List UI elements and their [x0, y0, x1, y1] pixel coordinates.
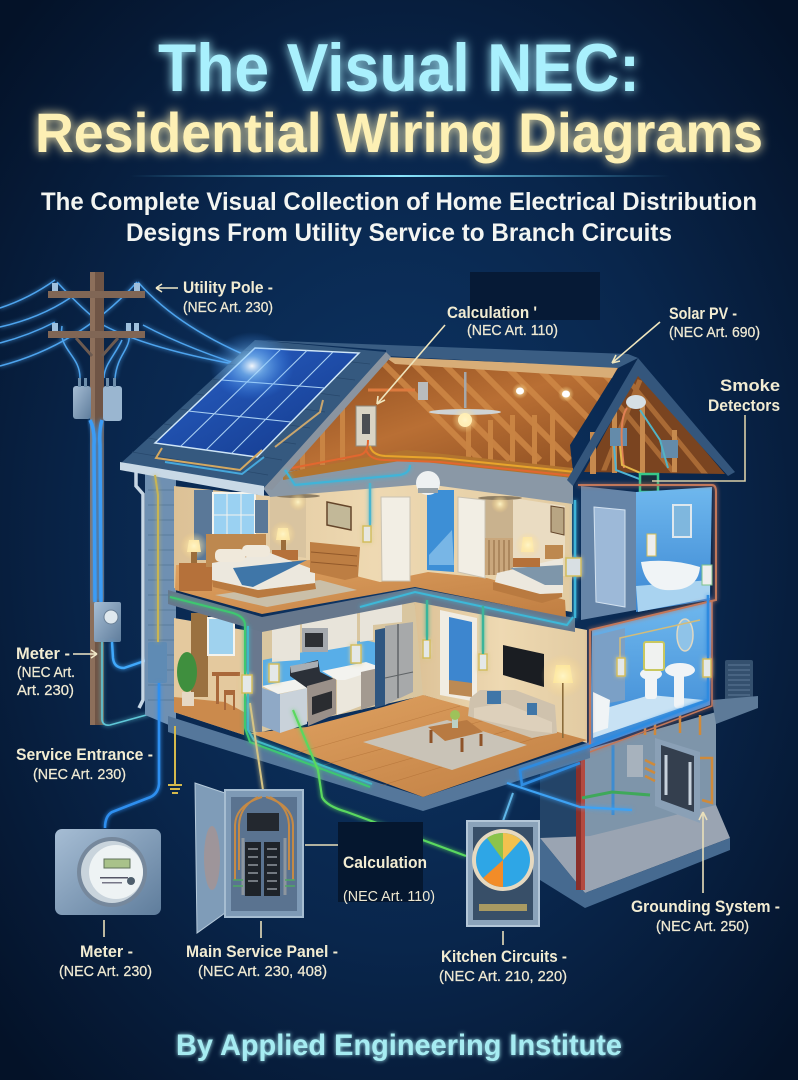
branch risers: [427, 600, 483, 654]
label: grounding system: [631, 812, 780, 935]
floor 1 kitchen and living walls: [246, 597, 426, 733]
label: main service panel: (NEC Art. 230, 408): [198, 963, 327, 980]
green floor run: [170, 597, 370, 787]
label: service entrance: (NEC Art. 230): [33, 766, 126, 783]
smoke detector: [416, 471, 440, 495]
label: kitchen circuits: [439, 931, 567, 985]
attic panel: [356, 406, 376, 446]
meter gauge: [77, 837, 147, 907]
outlets: [242, 526, 711, 693]
label: solar pv: Solar PV -: [669, 304, 737, 323]
right column upper rooms: [581, 486, 712, 620]
title: Residential Wiring Diagrams: [35, 101, 763, 164]
main roof: [120, 332, 638, 496]
breakers: [245, 842, 261, 896]
left siding: [145, 470, 176, 728]
right gable roof edge: [567, 358, 735, 486]
label: smoke detectors: Smoke: [720, 376, 780, 395]
label: pole meter: Art. 230): [17, 682, 74, 699]
label: meter: [59, 920, 152, 980]
solar glare: [210, 332, 294, 400]
label: main service panel: [186, 921, 338, 980]
second bedroom: [493, 506, 564, 603]
kitchen: [262, 600, 413, 733]
label: utility pole: [156, 278, 273, 316]
green and blue connectors to panels: [105, 683, 513, 856]
right column lower rooms: [590, 600, 712, 748]
panel body: [225, 790, 303, 917]
utility pole with wires: [0, 272, 262, 725]
label: meter: (NEC Art. 230): [59, 963, 152, 980]
copper risers: [578, 485, 716, 745]
roof conduit: [156, 400, 323, 474]
title: The Visual NEC:: [158, 30, 640, 106]
rug and table: [363, 710, 527, 770]
transformers: [73, 378, 122, 421]
label: pole meter: [16, 644, 97, 699]
balustrade: [485, 538, 513, 575]
title: [35, 30, 763, 164]
left nightstand and lamp: [179, 532, 212, 591]
subtitle: [41, 188, 757, 247]
basement conduit: [507, 783, 632, 810]
dishwasher: [361, 667, 383, 710]
author credit: By Applied Engineering Institute: [176, 1029, 622, 1062]
hallway door: [440, 610, 477, 702]
kitchen circuits panel illustration: [467, 821, 539, 926]
television: [503, 645, 544, 687]
pie chart: [472, 829, 534, 891]
label: kitchen circuits: (NEC Art. 210, 220): [439, 968, 567, 985]
main service panel illustration: [195, 783, 303, 933]
floor 2 slab: [168, 588, 575, 632]
bathroom sink and toilet: [593, 663, 695, 733]
label: grounding system: Grounding System -: [631, 897, 780, 916]
floor lamp: [541, 654, 585, 738]
label: service entrance: Service Entrance -: [16, 745, 153, 764]
dining table: [212, 672, 240, 710]
gable boxes: [610, 428, 678, 458]
panel door: [195, 783, 225, 933]
power lines: [0, 280, 262, 378]
basement service panel: [645, 712, 712, 823]
pole: [90, 272, 104, 725]
attic wiring: [292, 390, 575, 476]
label: solar pv: (NEC Art. 690): [669, 324, 760, 341]
label: attic calculation: Calculation ': [447, 303, 537, 322]
bathroom door: [594, 507, 625, 607]
label: grounding system: (NEC Art. 250): [656, 918, 749, 935]
bed: [206, 534, 316, 598]
range: [290, 660, 336, 726]
label: attic calculation: [377, 272, 600, 404]
attic fan: [429, 372, 501, 433]
right gable: [584, 376, 725, 492]
air conditioner: [712, 660, 758, 724]
label: smoke detectors: [652, 376, 780, 481]
plant: [177, 652, 197, 706]
label: meter: Meter -: [80, 942, 133, 961]
label: main service panel: Main Service Panel -: [186, 942, 338, 961]
floor 1 floor: [250, 695, 587, 797]
right cabinet and counter: [322, 662, 383, 715]
floor 1 slab: [168, 716, 590, 811]
green junction: [640, 474, 658, 492]
gable smoke detector: [626, 395, 646, 409]
calculation cover patch and label: (NEC Art. 110): [343, 888, 435, 905]
label: service entrance: [16, 745, 153, 783]
pole meter: [94, 602, 121, 642]
subtitle: The Complete Visual Collection of Home Electrical Distribution: [41, 188, 757, 216]
recessed lights: [512, 383, 574, 402]
refrigerator: [375, 622, 413, 708]
floor 2 walls: [174, 482, 572, 612]
floor 2 floor: [175, 560, 566, 617]
bath fixtures: [641, 505, 712, 590]
label: kitchen circuits: Kitchen Circuits -: [441, 947, 567, 966]
blue floor run: [360, 592, 573, 625]
doors: [381, 497, 485, 581]
house: [16, 272, 780, 1062]
label: pole meter: Meter -: [16, 644, 70, 663]
solar panel array: [155, 348, 359, 457]
label: utility pole: (NEC Art. 230): [183, 299, 273, 316]
dresser: [310, 542, 360, 580]
attic beam: [385, 357, 618, 378]
label: smoke detectors: Detectors: [708, 396, 780, 415]
rug: [215, 580, 357, 607]
calculation cover patch and label: Calculation: [343, 853, 427, 872]
label: solar pv: [612, 304, 760, 363]
meter feed wire: [112, 642, 153, 668]
attic: [283, 357, 618, 480]
label: utility pole: Utility Pole -: [183, 278, 273, 297]
downspout: [136, 472, 143, 708]
floor 1 left room: [174, 613, 244, 735]
house meter box: [148, 642, 167, 683]
upper cabinets: [272, 600, 402, 662]
label: attic calculation: (NEC Art. 110): [467, 322, 558, 339]
lower cabinet: [262, 679, 307, 733]
stud wall between floors: [262, 456, 573, 504]
ground-level wire: [102, 642, 150, 725]
ceiling fans: [276, 493, 522, 513]
meter card: [55, 829, 161, 915]
label: pole meter: (NEC Art.: [17, 664, 75, 681]
basement pipes: [582, 745, 650, 815]
labels: [16, 272, 780, 985]
left yellow feeder: [155, 475, 158, 642]
second nightstand and lamp: [270, 521, 298, 560]
sofa: [468, 690, 557, 738]
microwave: [302, 628, 328, 652]
wiring: [155, 465, 716, 787]
bedroom 1: [120, 332, 758, 810]
picture: [327, 502, 351, 530]
subtitle: Designs From Utility Service to Branch Circuits: [126, 219, 672, 247]
basement: [540, 712, 730, 908]
calculation cover patch and label: [305, 822, 435, 905]
ground symbol: [168, 726, 182, 793]
service drop conduit: [90, 420, 102, 602]
backsplash: [263, 640, 385, 686]
